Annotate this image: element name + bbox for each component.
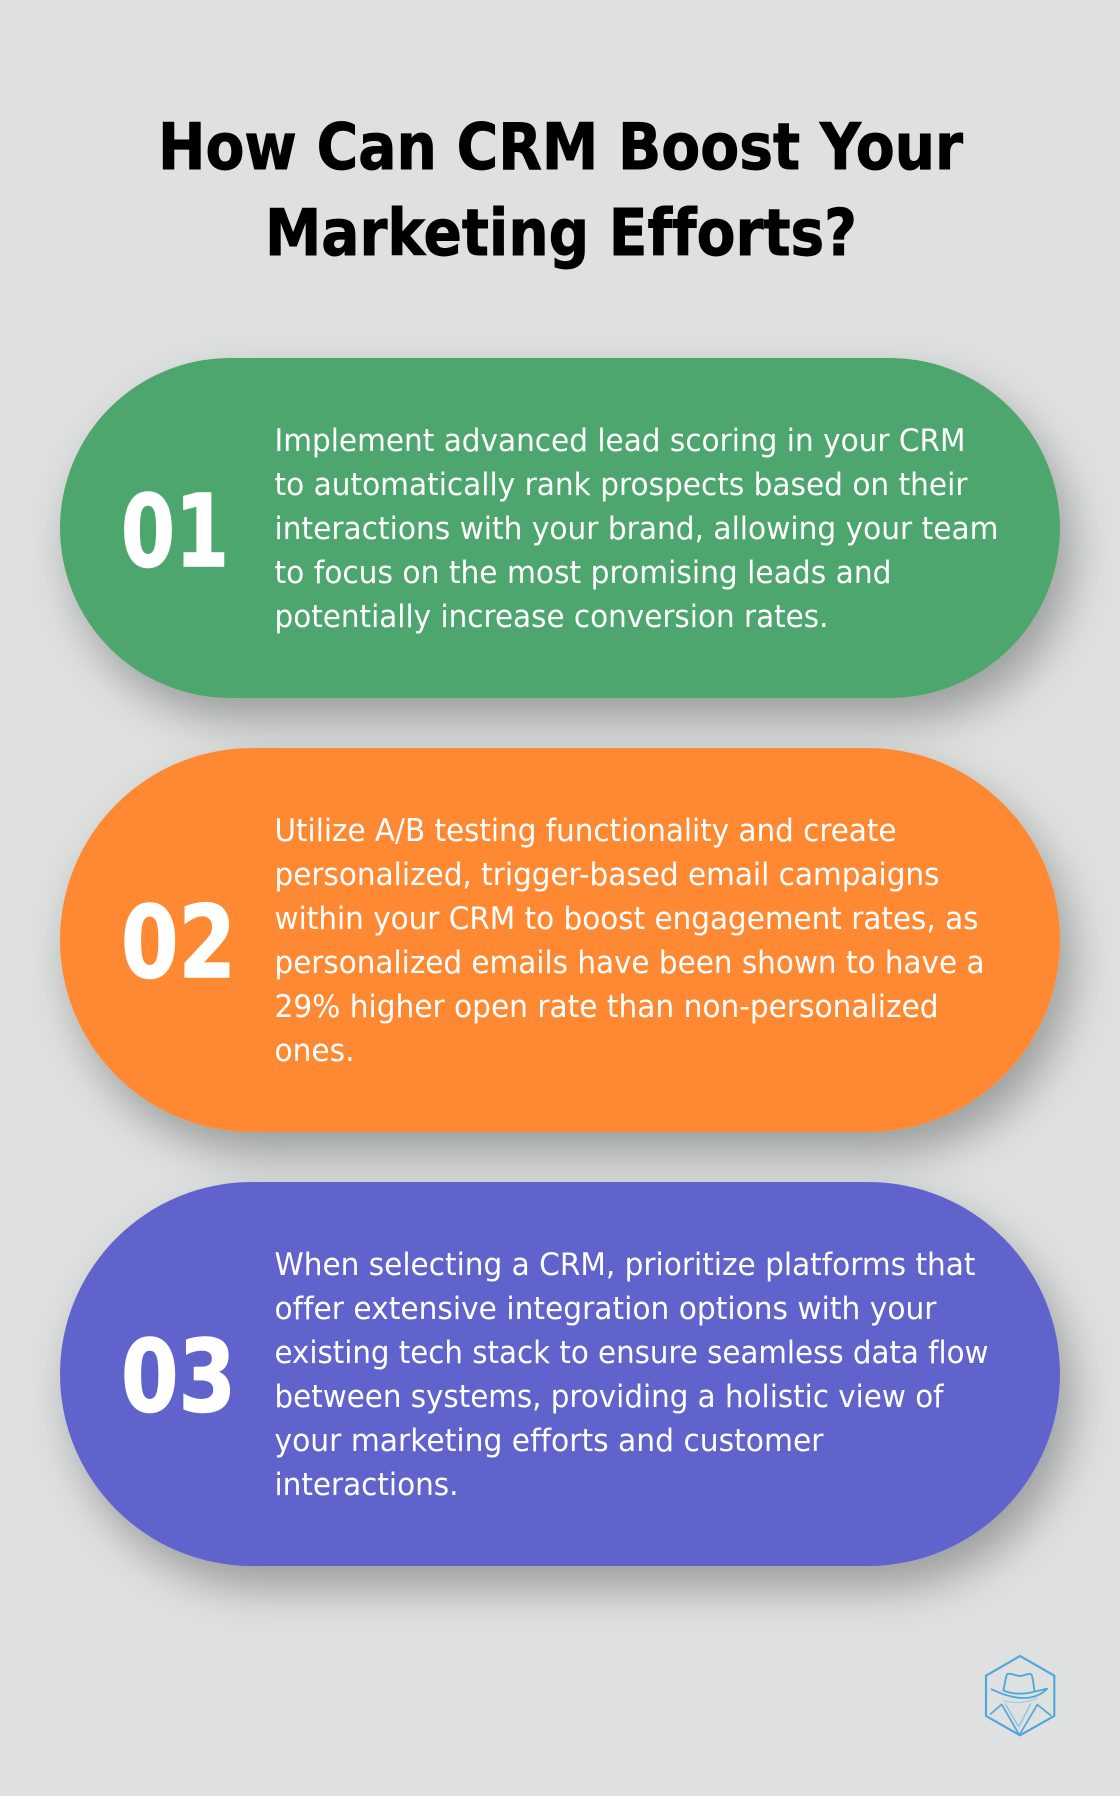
text block: step 02: personalized emails have been shown to have a <box>274 945 984 981</box>
text block: step 02: 29% higher open rate than non-personalized <box>274 989 938 1025</box>
pill: green <box>60 358 1060 698</box>
text block: step 03: interactions. <box>274 1467 458 1503</box>
number 02: 02 <box>121 884 236 1001</box>
text block: step 03: between systems, providing a holistic view of <box>274 1379 945 1415</box>
text block: step 02: ones. <box>274 1033 354 1069</box>
pill: purple <box>60 1182 1060 1566</box>
text block: step 01: to focus on the most promising leads and <box>274 555 892 591</box>
text block: step 02: Utilize A/B testing functionality and create <box>274 813 896 849</box>
pill: orange <box>60 748 1060 1132</box>
panel: step 03 <box>60 1182 1060 1566</box>
text block: step 01: interactions with your brand, allowing your team <box>274 511 998 547</box>
text block: step 03: When selecting a CRM, prioritize platforms that <box>274 1247 976 1283</box>
title: How Can CRM Boost Your <box>158 111 963 185</box>
title: Marketing Efforts? <box>265 197 857 271</box>
panel: step 02 <box>60 748 1060 1132</box>
text block: step 02 <box>274 813 984 1069</box>
number 01: 01 <box>121 473 229 590</box>
text block: step 01: Implement advanced lead scoring in your CRM <box>274 423 966 459</box>
text block: step 03 <box>274 1247 988 1503</box>
panel: step 01 <box>60 358 1060 698</box>
text block: step 01: potentially increase conversion rates. <box>274 599 828 635</box>
text block: step 03: existing tech stack to ensure seamless data flow <box>274 1335 988 1371</box>
icon: detective hat hexagon logo <box>986 1656 1054 1735</box>
text block: step 01 <box>274 423 998 635</box>
title <box>158 111 963 271</box>
text block: step 03: offer extensive integration options with your <box>274 1291 937 1327</box>
text block: step 03: your marketing efforts and customer <box>274 1423 824 1459</box>
number 03: 03 <box>121 1318 236 1435</box>
text block: step 02: personalized, trigger-based email campaigns <box>274 857 940 893</box>
text block: step 01: to automatically rank prospects based on their <box>274 467 968 503</box>
text block: step 02: within your CRM to boost engagement rates, as <box>274 901 978 937</box>
